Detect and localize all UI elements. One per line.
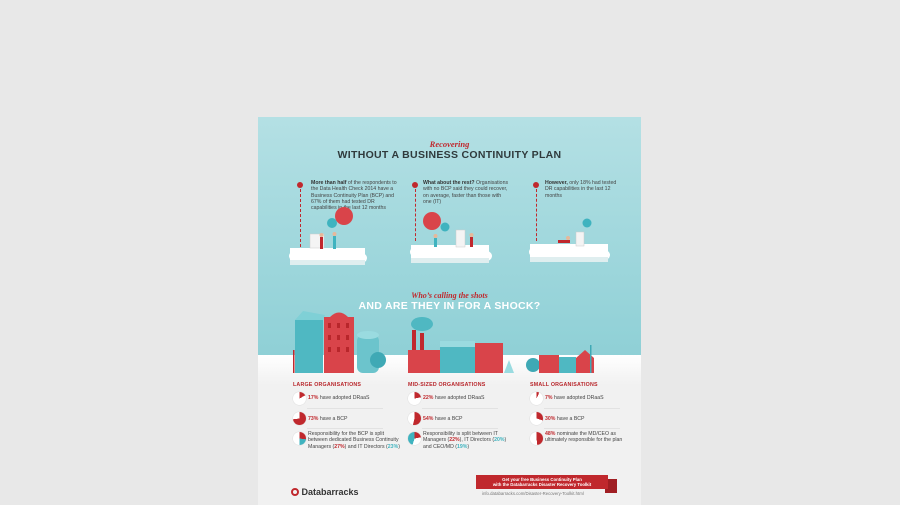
column: large organisations: LARGE ORGANISATIONS	[293, 382, 361, 388]
column: large organisations: 73% have a BCP	[308, 416, 348, 422]
platform 2	[410, 212, 492, 263]
title	[338, 139, 561, 161]
infographic panel	[258, 117, 641, 505]
column: small organisations: 48% nominate the MD/CEO as ultimately responsible for the plan	[545, 431, 622, 443]
column: mid-sized organisations: 22% have adopted DRaaS	[423, 395, 484, 401]
small org buildings	[526, 345, 594, 373]
text block 3	[533, 180, 616, 241]
platform 1	[289, 207, 367, 265]
column: large organisations: 17% have adopted DRaaS	[308, 395, 369, 401]
column: small organisations: 30% have a BCP	[545, 416, 585, 422]
section 2 heading	[358, 291, 541, 312]
call-to-action ribbon	[476, 475, 617, 493]
text block 2	[412, 180, 508, 241]
title: Recovering	[430, 139, 469, 149]
section 2 heading: Who’s calling the shots	[411, 291, 488, 300]
column: mid-sized organisations: 54% have a BCP	[423, 416, 463, 422]
column: small organisations: SMALL ORGANISATIONS	[530, 382, 598, 388]
column: mid-sized organisations: Responsibility is split between IT Managers (22%), IT Directors (20%) and CEO/MD (19%)	[423, 431, 506, 450]
text: More than half of the respondents to the Data Health Check 2014 have a Business Continuity Plan (BCP) and 67% of them had tested DR capabilities in the last 12 months	[311, 180, 397, 211]
mid org buildings	[408, 317, 514, 373]
ground	[258, 355, 641, 385]
column: mid-sized organisations: MID-SIZED ORGANISATIONS	[408, 382, 485, 388]
column: small organisations: 7% have adopted DRaaS	[545, 395, 604, 401]
title: WITHOUT A BUSINESS CONTINUITY PLAN	[338, 149, 561, 161]
column: mid-sized organisations	[408, 382, 506, 450]
large org buildings	[293, 311, 386, 373]
column: large organisations	[292, 382, 400, 450]
text block 1	[297, 180, 397, 247]
url: info.databarracks.com/Disaster-Recovery-Toolkit.html	[482, 491, 584, 496]
column: small organisations	[530, 382, 622, 446]
text: However, only 18% had tested DR capabilities in the last 12 months	[545, 180, 616, 199]
text: What about the rest? Organisations with no BCP said they could recover, on average, faster than those with one (IT)	[423, 180, 508, 205]
call-to-action ribbon: with the Databarracks Disaster Recovery Toolkit	[493, 482, 591, 487]
platform 3	[529, 218, 610, 262]
logo: Databarracks	[302, 487, 359, 497]
call-to-action ribbon: Get your free Business Continuity Plan	[502, 477, 582, 482]
teal top section	[258, 117, 641, 355]
skyline	[293, 311, 594, 373]
section 2 heading: AND ARE THEY IN FOR A SHOCK?	[358, 300, 541, 312]
scene illustrations	[289, 207, 610, 265]
column: large organisations: Responsibility for the BCP is split between dedicated Business Continuity Managers (27%) and IT Directors (23%)	[308, 431, 400, 450]
